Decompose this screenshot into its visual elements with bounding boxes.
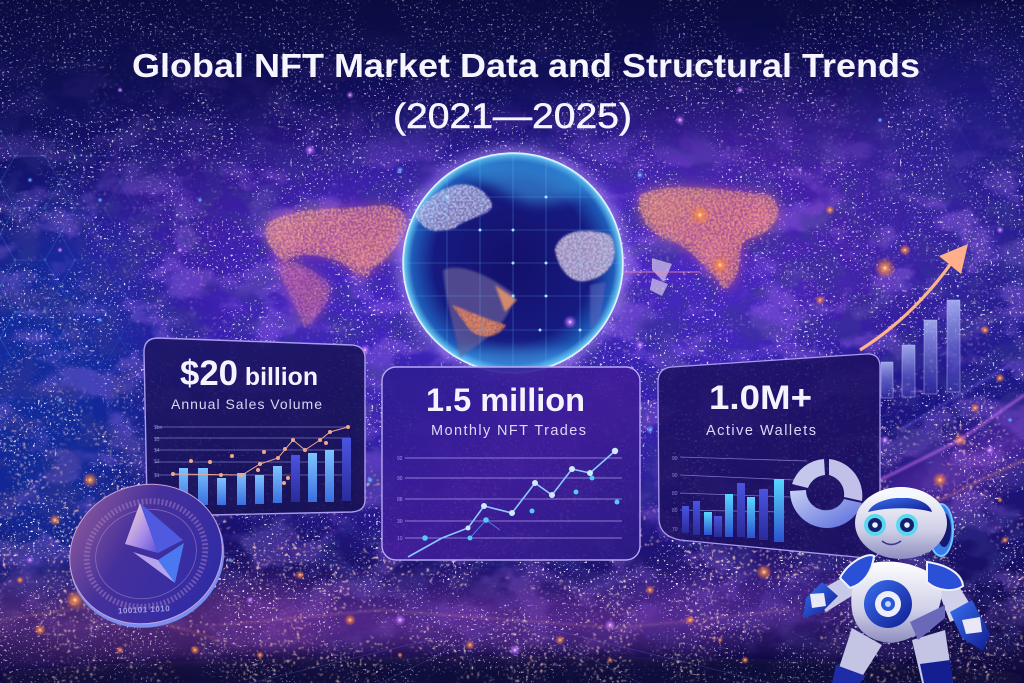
- chart: trades line: [397, 448, 622, 557]
- stat: 1.5 million: 1.5 million: [426, 382, 585, 418]
- panel: annual sales volume: [144, 338, 365, 516]
- chart: donut: [790, 459, 862, 528]
- chart: wallet bars: [672, 456, 807, 542]
- chart: wallet bars: 70: [672, 527, 678, 533]
- title: (2021—2025): [393, 97, 632, 136]
- chart: sales bars and line: $5: [154, 437, 160, 443]
- title: [132, 47, 920, 136]
- chart: sales bars and line: $3: [154, 459, 160, 465]
- illustration: robot: [803, 487, 990, 683]
- label: annual sales volume: Annual Sales Volume: [171, 396, 322, 412]
- panel: monthly NFT trades: [382, 367, 640, 560]
- chart: trades line: 92: [397, 456, 403, 462]
- panel: active wallets: [658, 354, 880, 558]
- chart: wallet bars: 90: [672, 473, 678, 479]
- chart: trades line: 90: [397, 476, 403, 482]
- robot legs: [832, 628, 953, 683]
- icon: ethereum coin: 100101 1010: [118, 604, 170, 616]
- stat: 1.0M+: 1.0M+: [709, 379, 812, 417]
- label: active wallets: Active Wallets: [706, 423, 816, 439]
- world map: left landmass: [266, 205, 406, 328]
- chart: trades line: 88: [397, 497, 403, 503]
- chart: sales bars and line: $1: [154, 473, 160, 479]
- robot torso: [851, 562, 945, 643]
- chart: wallet bars: 80: [672, 508, 678, 514]
- robot arms: [803, 572, 990, 651]
- chart: trades line: 30: [397, 519, 403, 525]
- stat: $20 billion: $20 billion: [180, 354, 318, 393]
- chart: sales bars and line: $4: [154, 448, 160, 454]
- icon: ethereum coin: [51, 465, 243, 648]
- chart: trades line: 10: [397, 536, 403, 542]
- label: monthly NFT trades: Monthly NFT Trades: [431, 423, 586, 439]
- mini bar chart and rising arrow: [860, 244, 968, 398]
- title: Global NFT Market Data and Structural Trends: [132, 47, 920, 84]
- robot shoulders: [840, 555, 963, 590]
- world map: right landmass: [620, 187, 778, 296]
- chart: sales bars and line: $bn: [154, 425, 163, 431]
- robot head: [855, 487, 953, 559]
- chart: sales bars and line: [154, 425, 351, 505]
- chart: wallet bars: 90: [672, 456, 678, 462]
- chart: wallet bars: 80: [672, 491, 678, 497]
- globe: [397, 147, 629, 379]
